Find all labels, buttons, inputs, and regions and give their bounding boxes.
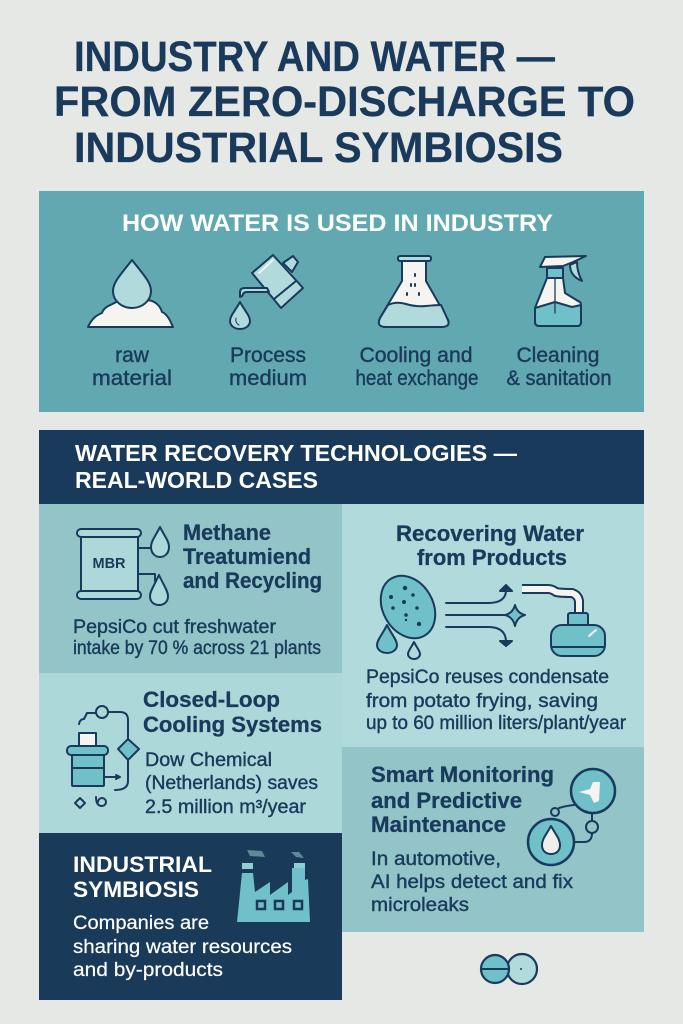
text: Dow Chemical	[145, 750, 318, 818]
heading: closed-loop: Cooling Systems	[143, 712, 322, 737]
icon: MBR tank	[77, 527, 169, 605]
title	[54, 33, 635, 172]
text: companies sharing: and by-products	[73, 960, 223, 981]
arrows: process flows	[446, 585, 525, 646]
panel: methane treatment and recycling	[39, 504, 342, 673]
text: Dow Chemical: (Netherlands) saves	[145, 773, 318, 794]
heading: industrial symbiosis: INDUSTRIAL	[73, 852, 212, 877]
label: cooling and heat exchange: heat exchange	[356, 367, 478, 390]
icon: closed-loop cooling	[67, 706, 139, 808]
heading: closed-loop: Closed-Loop	[143, 687, 280, 712]
icon: potato with drops	[370, 566, 446, 659]
icon: process medium pouring vessel	[230, 255, 303, 329]
label: cleaning and sanitation	[506, 344, 612, 390]
heading: smart monitoring: Smart Monitoring	[371, 762, 554, 787]
icon: cooling flask	[379, 256, 449, 327]
icon: raw material drop on mound	[88, 260, 173, 327]
heading: methane treatment	[183, 520, 322, 593]
heading: industrial symbiosis	[73, 852, 212, 902]
heading: methane treatment: Methane	[183, 520, 271, 545]
heading: smart monitoring: and Predictive	[371, 788, 522, 813]
panel: industrial symbiosis	[39, 833, 342, 1000]
heading: methane treatment: and Recycling	[183, 568, 322, 593]
title: INDUSTRY AND WATER —	[74, 33, 555, 81]
heading: recovering water: from Products	[417, 545, 567, 570]
label: cooling and heat exchange: Cooling and	[360, 344, 472, 367]
label: process medium: medium	[229, 367, 307, 390]
heading: closed-loop	[143, 687, 322, 737]
heading: smart monitoring: Maintenance	[371, 812, 506, 837]
title: FROM ZERO-DISCHARGE TO	[54, 78, 635, 126]
text: PepsiCo freshwater: intake by 70 % across 21 plants	[73, 638, 321, 659]
text: PepsiCo condensate: from potato frying, saving	[366, 690, 598, 712]
label: process medium: Process	[230, 344, 306, 367]
panel: smart monitoring	[342, 747, 644, 932]
text: PepsiCo condensate: PepsiCo reuses condensate	[366, 666, 609, 688]
text: companies sharing	[73, 913, 292, 981]
icon: condenser nozzle	[522, 589, 605, 656]
heading: methane treatment: Treatumiend	[183, 544, 311, 569]
icon: sensors	[528, 769, 615, 865]
panel: header water recovery technologies	[39, 430, 644, 504]
heading: recovering water: Recovering Water	[396, 521, 584, 546]
text: Dow Chemical: Dow Chemical	[145, 750, 272, 771]
icon: MBR tank: MBR	[92, 556, 126, 572]
title: INDUSTRIAL SYMBIOSIS	[74, 124, 563, 172]
text: automotive AI: AI helps detect and fix	[371, 871, 573, 893]
label: cleaning and sanitation: Cleaning	[516, 344, 600, 367]
label: raw material: raw	[115, 344, 150, 367]
label: raw material	[92, 344, 172, 390]
icon: bottom double circle	[481, 954, 537, 984]
text: PepsiCo freshwater: PepsiCo cut freshwater	[73, 617, 277, 638]
panel: recovering water from products	[342, 504, 644, 747]
text: Dow Chemical: 2.5 million m³/year	[145, 797, 307, 818]
text: automotive AI	[371, 848, 573, 916]
icon: factory	[237, 850, 310, 922]
label: cleaning and sanitation: & sanitation	[506, 367, 612, 390]
text: PepsiCo condensate: up to 60 million liters/plant/year	[366, 712, 626, 734]
icon: spray bottle	[535, 256, 586, 326]
panel: how water is used in industry	[39, 191, 644, 412]
panel heading: HOW WATER IS USED IN INDUSTRY	[122, 210, 553, 237]
panel: header water recovery technologies: WATER RECOVERY TECHNOLOGIES —	[75, 440, 517, 466]
heading: smart monitoring	[371, 762, 554, 837]
text: PepsiCo condensate	[366, 666, 626, 734]
label: raw material: material	[92, 367, 172, 390]
text: automotive AI: In automotive,	[371, 848, 501, 870]
heading: recovering water	[396, 521, 584, 570]
text: PepsiCo freshwater	[73, 617, 321, 659]
text: companies sharing: Companies are	[73, 913, 209, 934]
panel: closed-loop cooling systems	[39, 673, 342, 833]
text: companies sharing: sharing water resources	[73, 937, 292, 958]
label: process medium	[229, 344, 307, 390]
label: cooling and heat exchange	[356, 344, 478, 390]
panel: header water recovery technologies: REAL-WORLD CASES	[75, 467, 318, 493]
text: automotive AI: microleaks	[371, 894, 469, 916]
heading: industrial symbiosis: SYMBIOSIS	[73, 877, 199, 902]
